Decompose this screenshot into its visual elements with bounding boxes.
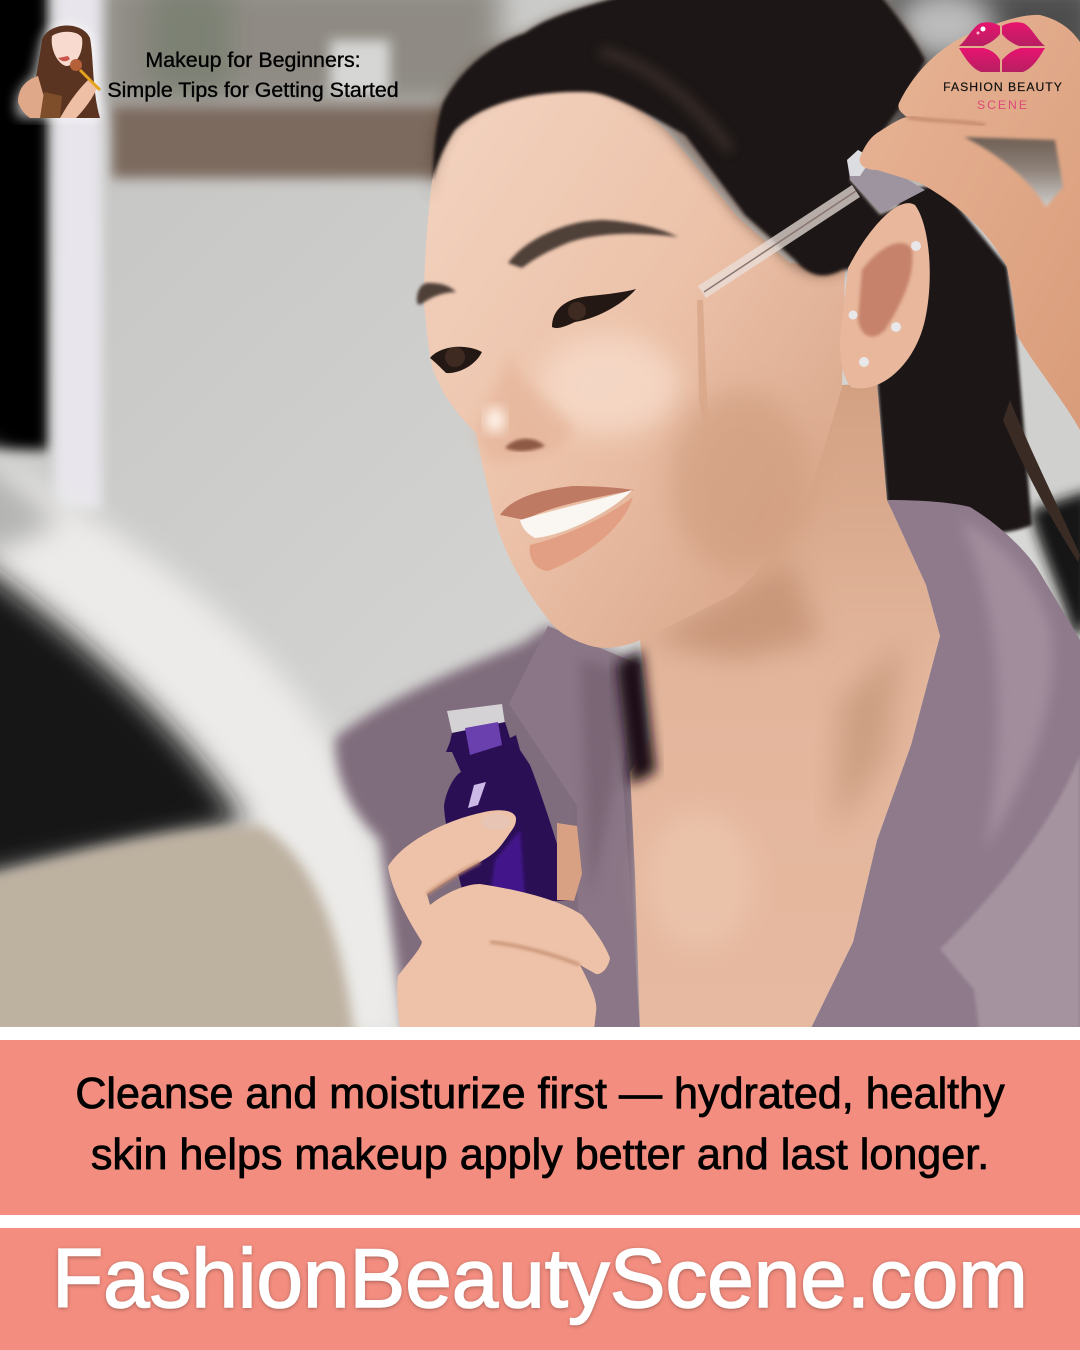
website banner: FashionBeautyScene.com [52, 1231, 1028, 1325]
mouth [500, 486, 634, 571]
header title: Simple Tips for Getting Started [107, 78, 399, 102]
logo text [943, 80, 1063, 112]
website banner [0, 1228, 1080, 1350]
tip banner: skin helps makeup apply better and last longer. [91, 1131, 989, 1179]
nose [476, 350, 573, 463]
serum bottle [444, 704, 574, 901]
robe [335, 500, 1080, 1030]
hand with dropper [860, 15, 1080, 430]
avatar: woman with makeup brush [8, 23, 102, 125]
earrings [848, 241, 921, 367]
tip banner: Cleanse and moisturize first — hydrated, healthy [75, 1070, 1005, 1118]
background: foreground mirror blur [0, 440, 407, 1040]
hand with bottle [388, 810, 610, 1030]
logo text: FASHION BEAUTY [943, 80, 1063, 94]
background: blurred room [0, 0, 1080, 1040]
serum drop [697, 300, 712, 430]
eyebrows [417, 220, 678, 305]
header title [107, 48, 399, 102]
neck and chest [617, 383, 940, 1030]
photo: woman applying serum [0, 0, 1080, 1027]
hair: back ponytail [877, 185, 1080, 562]
hair: front [430, 0, 925, 276]
dropper [698, 150, 925, 298]
ear [840, 203, 930, 388]
eyes [430, 289, 636, 373]
logo: lips [959, 22, 1045, 72]
face [424, 80, 845, 648]
logo text: SCENE [977, 98, 1029, 112]
header title: Makeup for Beginners: [145, 48, 361, 72]
cheek highlight [540, 335, 680, 435]
tip banner [0, 1040, 1080, 1215]
